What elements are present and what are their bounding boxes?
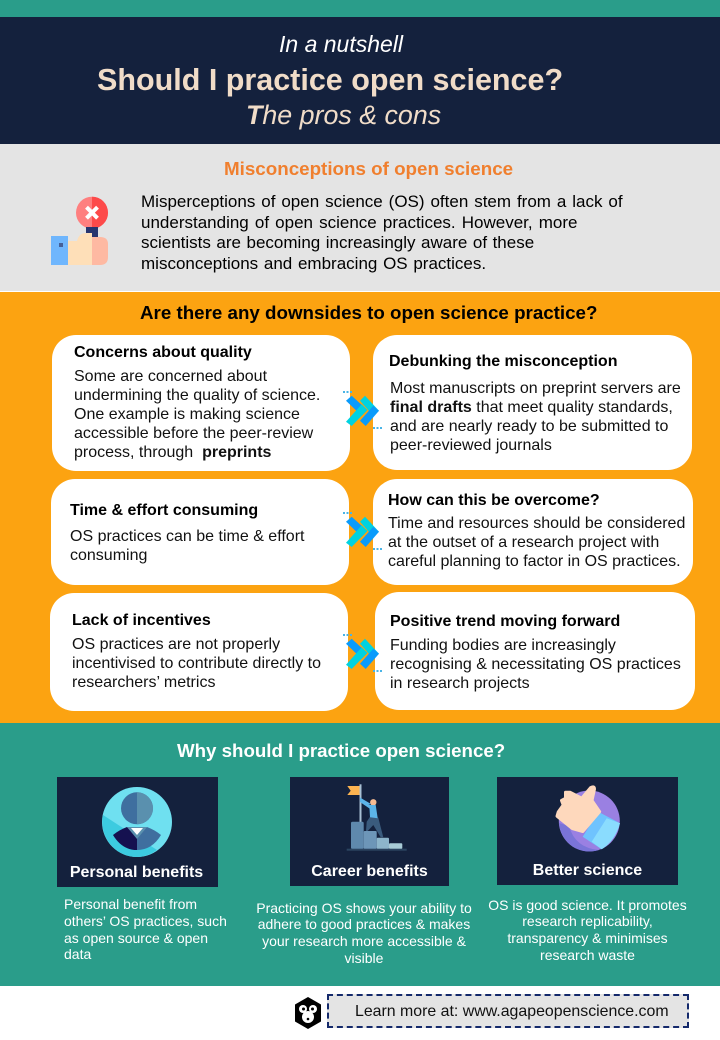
card text: researchers’ metrics xyxy=(72,674,215,691)
misconceptions text: understanding of open science practices. However, more xyxy=(141,213,577,232)
card text xyxy=(70,528,304,564)
downsides heading: Are there any downsides to open science practice? xyxy=(140,302,597,323)
card heading: Debunking the misconception xyxy=(389,353,617,370)
card text: Most manuscripts on preprint servers are xyxy=(390,380,681,397)
card text: in research projects xyxy=(390,675,530,692)
misconceptions heading: Misconceptions of open science xyxy=(224,158,513,179)
card: debunking xyxy=(373,335,692,470)
card text xyxy=(390,380,681,454)
tile label: Personal benefits xyxy=(70,864,203,881)
panel: why practice xyxy=(0,723,720,986)
card text xyxy=(390,637,681,692)
career text xyxy=(256,900,472,966)
misconceptions text: Misperceptions of open science (OS) often stem from a lack of xyxy=(141,192,623,211)
card text: recognising & necessitating OS practices xyxy=(390,656,681,673)
arrow 2 xyxy=(343,512,382,550)
card text xyxy=(388,515,685,570)
card: lack of incentives xyxy=(50,593,348,711)
misconceptions text xyxy=(141,192,623,273)
card text xyxy=(72,636,321,691)
misconceptions text: misconceptions and embracing OS practices. xyxy=(141,254,486,273)
misconceptions text: scientists are becoming increasingly aware of these xyxy=(141,233,534,252)
personal text xyxy=(64,896,227,962)
tile: career benefits xyxy=(290,777,449,886)
card text: process, through preprints xyxy=(74,444,271,461)
card text: Some are concerned about xyxy=(74,368,267,385)
tile: personal benefits xyxy=(57,777,218,887)
better science text: OS is good science. It promotes xyxy=(488,896,687,912)
card text: and are nearly ready to be submitted to xyxy=(390,418,668,435)
card heading: Lack of incentives xyxy=(72,612,211,629)
card text: final drafts that meet quality standards, xyxy=(390,399,673,416)
better science text: research waste xyxy=(540,947,635,963)
card text: Time and resources should be considered xyxy=(388,515,685,532)
why heading: Why should I practice open science? xyxy=(177,740,505,761)
subtitle: The pros & cons xyxy=(246,100,441,130)
card: positive trend xyxy=(375,592,695,710)
icon: thumb with cross xyxy=(51,196,108,265)
tile: better science xyxy=(497,777,678,885)
header banner xyxy=(0,17,720,144)
better science text xyxy=(488,896,687,963)
card text: careful planning to factor in OS practices. xyxy=(388,553,681,570)
logo: monkey hexagon xyxy=(295,997,321,1029)
card: concerns about quality xyxy=(52,335,350,471)
card text xyxy=(74,368,320,461)
personal text: Personal benefit from xyxy=(64,896,197,912)
card: overcome xyxy=(373,479,693,585)
card: time and effort xyxy=(51,479,349,585)
card text: at the outset of a research project with xyxy=(388,534,659,551)
personal text: data xyxy=(64,946,91,962)
career text: your research more accessible & xyxy=(262,933,466,949)
panel: downsides xyxy=(0,292,720,723)
card heading: Positive trend moving forward xyxy=(390,613,620,630)
career text: visible xyxy=(345,950,383,966)
tile label: Better science xyxy=(533,862,642,879)
card text: OS practices are not properly xyxy=(72,636,280,653)
panel: misconceptions xyxy=(0,144,720,291)
card text: OS practices can be time & effort xyxy=(70,528,304,545)
card text: consuming xyxy=(70,547,147,564)
card text: peer-reviewed journals xyxy=(390,437,552,454)
card heading: Time & effort consuming xyxy=(70,502,258,519)
card text: incentivised to contribute directly to xyxy=(72,655,321,672)
personal text: as open source & open xyxy=(64,930,208,946)
card heading: Concerns about quality xyxy=(74,344,252,361)
icon: thumbs up xyxy=(556,785,620,852)
card text: One example is making science xyxy=(74,406,300,423)
arrow 1 xyxy=(343,391,382,429)
career text: adhere to good practices & makes xyxy=(258,916,470,932)
tile label: Career benefits xyxy=(311,863,428,880)
career text: Practicing OS shows your ability to xyxy=(256,900,472,916)
card text: accessible before the peer-review xyxy=(74,425,313,442)
link text: Learn more at: www.agapeopenscience.com xyxy=(355,1003,669,1020)
card text: Funding bodies are increasingly xyxy=(390,637,616,654)
title: Should I practice open science? xyxy=(97,63,563,97)
icon: climber with flag xyxy=(346,784,407,851)
better science text: research replicability, xyxy=(522,913,653,929)
card text: undermining the quality of science. xyxy=(74,387,320,404)
arrow 3 xyxy=(343,634,382,672)
better science text: transparency & minimises xyxy=(507,930,668,946)
link box xyxy=(327,994,689,1028)
personal text: others’ OS practices, such xyxy=(64,913,227,929)
icon: person xyxy=(102,787,172,857)
header line: In a nutshell: In a nutshell xyxy=(279,31,403,57)
top teal strip xyxy=(0,0,720,17)
card heading: How can this be overcome? xyxy=(388,492,600,509)
